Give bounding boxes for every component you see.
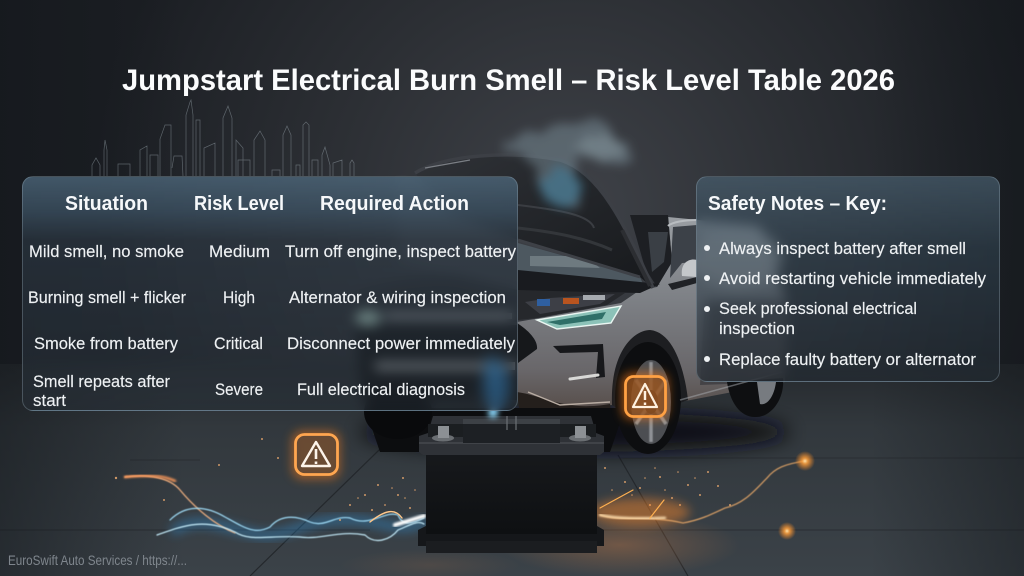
row: burning smell: [28, 288, 506, 307]
rear wheel: [727, 378, 783, 417]
row: smell repeats: Full electrical diagnosis: [297, 380, 465, 399]
row: smell repeats: Severe: [215, 380, 263, 399]
note: always inspect: Always inspect battery after smell: [719, 239, 966, 258]
row: smoke from battery: [34, 334, 515, 353]
row: mild smell: [29, 242, 516, 261]
car: [352, 155, 790, 454]
row: smell repeats: [33, 372, 465, 410]
row: burning smell: Alternator & wiring inspection: [289, 288, 506, 307]
panel: safety notes: [696, 176, 1000, 382]
table header: Required Action: [320, 193, 469, 215]
icon: warning on front wheel: [622, 373, 668, 419]
panel: risk level table: [22, 176, 518, 411]
front wheel: [615, 342, 681, 454]
headlight: [537, 306, 621, 329]
watermark: EuroSwift Auto Services / https://...: [8, 552, 187, 568]
skyline outline: [92, 100, 354, 176]
row: mild smell: Mild smell, no smoke: [29, 242, 184, 261]
open hood: [415, 155, 653, 288]
note: seek inspection: [704, 299, 917, 338]
safety notes heading: Safety Notes – Key:: [708, 193, 887, 215]
table header: [65, 193, 469, 215]
row: smoke from battery: Smoke from battery: [34, 334, 178, 353]
row: smell repeats: start: [33, 391, 66, 410]
icon: warning on floor: [292, 431, 340, 479]
sparks: [115, 438, 731, 521]
table header: Risk Level: [194, 193, 284, 215]
windshield and cabin: [630, 215, 697, 290]
row: smoke from battery: Disconnect power immediately: [287, 334, 515, 353]
title: Jumpstart Electrical Burn Smell – Risk Level Table 2026: [122, 64, 895, 97]
row: burning smell: High: [223, 288, 255, 307]
wheel arch: [612, 330, 688, 410]
row: mild smell: Turn off engine, inspect battery: [285, 242, 516, 261]
row: burning smell: Burning smell + flicker: [28, 288, 186, 307]
battery smoke: [483, 356, 509, 418]
lightning: left blue arcs: [125, 476, 424, 540]
note: avoid restarting: Avoid restarting vehicle immediately: [719, 269, 986, 288]
note: seek inspection: inspection: [719, 319, 795, 338]
engine bay: [518, 243, 660, 320]
row: mild smell: Medium: [209, 242, 270, 261]
floor: [0, 364, 1024, 576]
note: replace faulty: Replace faulty battery or alternator: [719, 350, 976, 369]
blurred front behind table: [352, 176, 518, 400]
lightning: right orange arc: [590, 451, 815, 540]
row: smell repeats: Smell repeats after: [33, 372, 170, 391]
table header: Situation: [65, 193, 148, 215]
row: smoke from battery: Critical: [214, 334, 263, 353]
battery: [418, 416, 604, 553]
note: seek inspection: Seek professional electrical: [719, 299, 917, 318]
hood smoke: [500, 118, 632, 208]
